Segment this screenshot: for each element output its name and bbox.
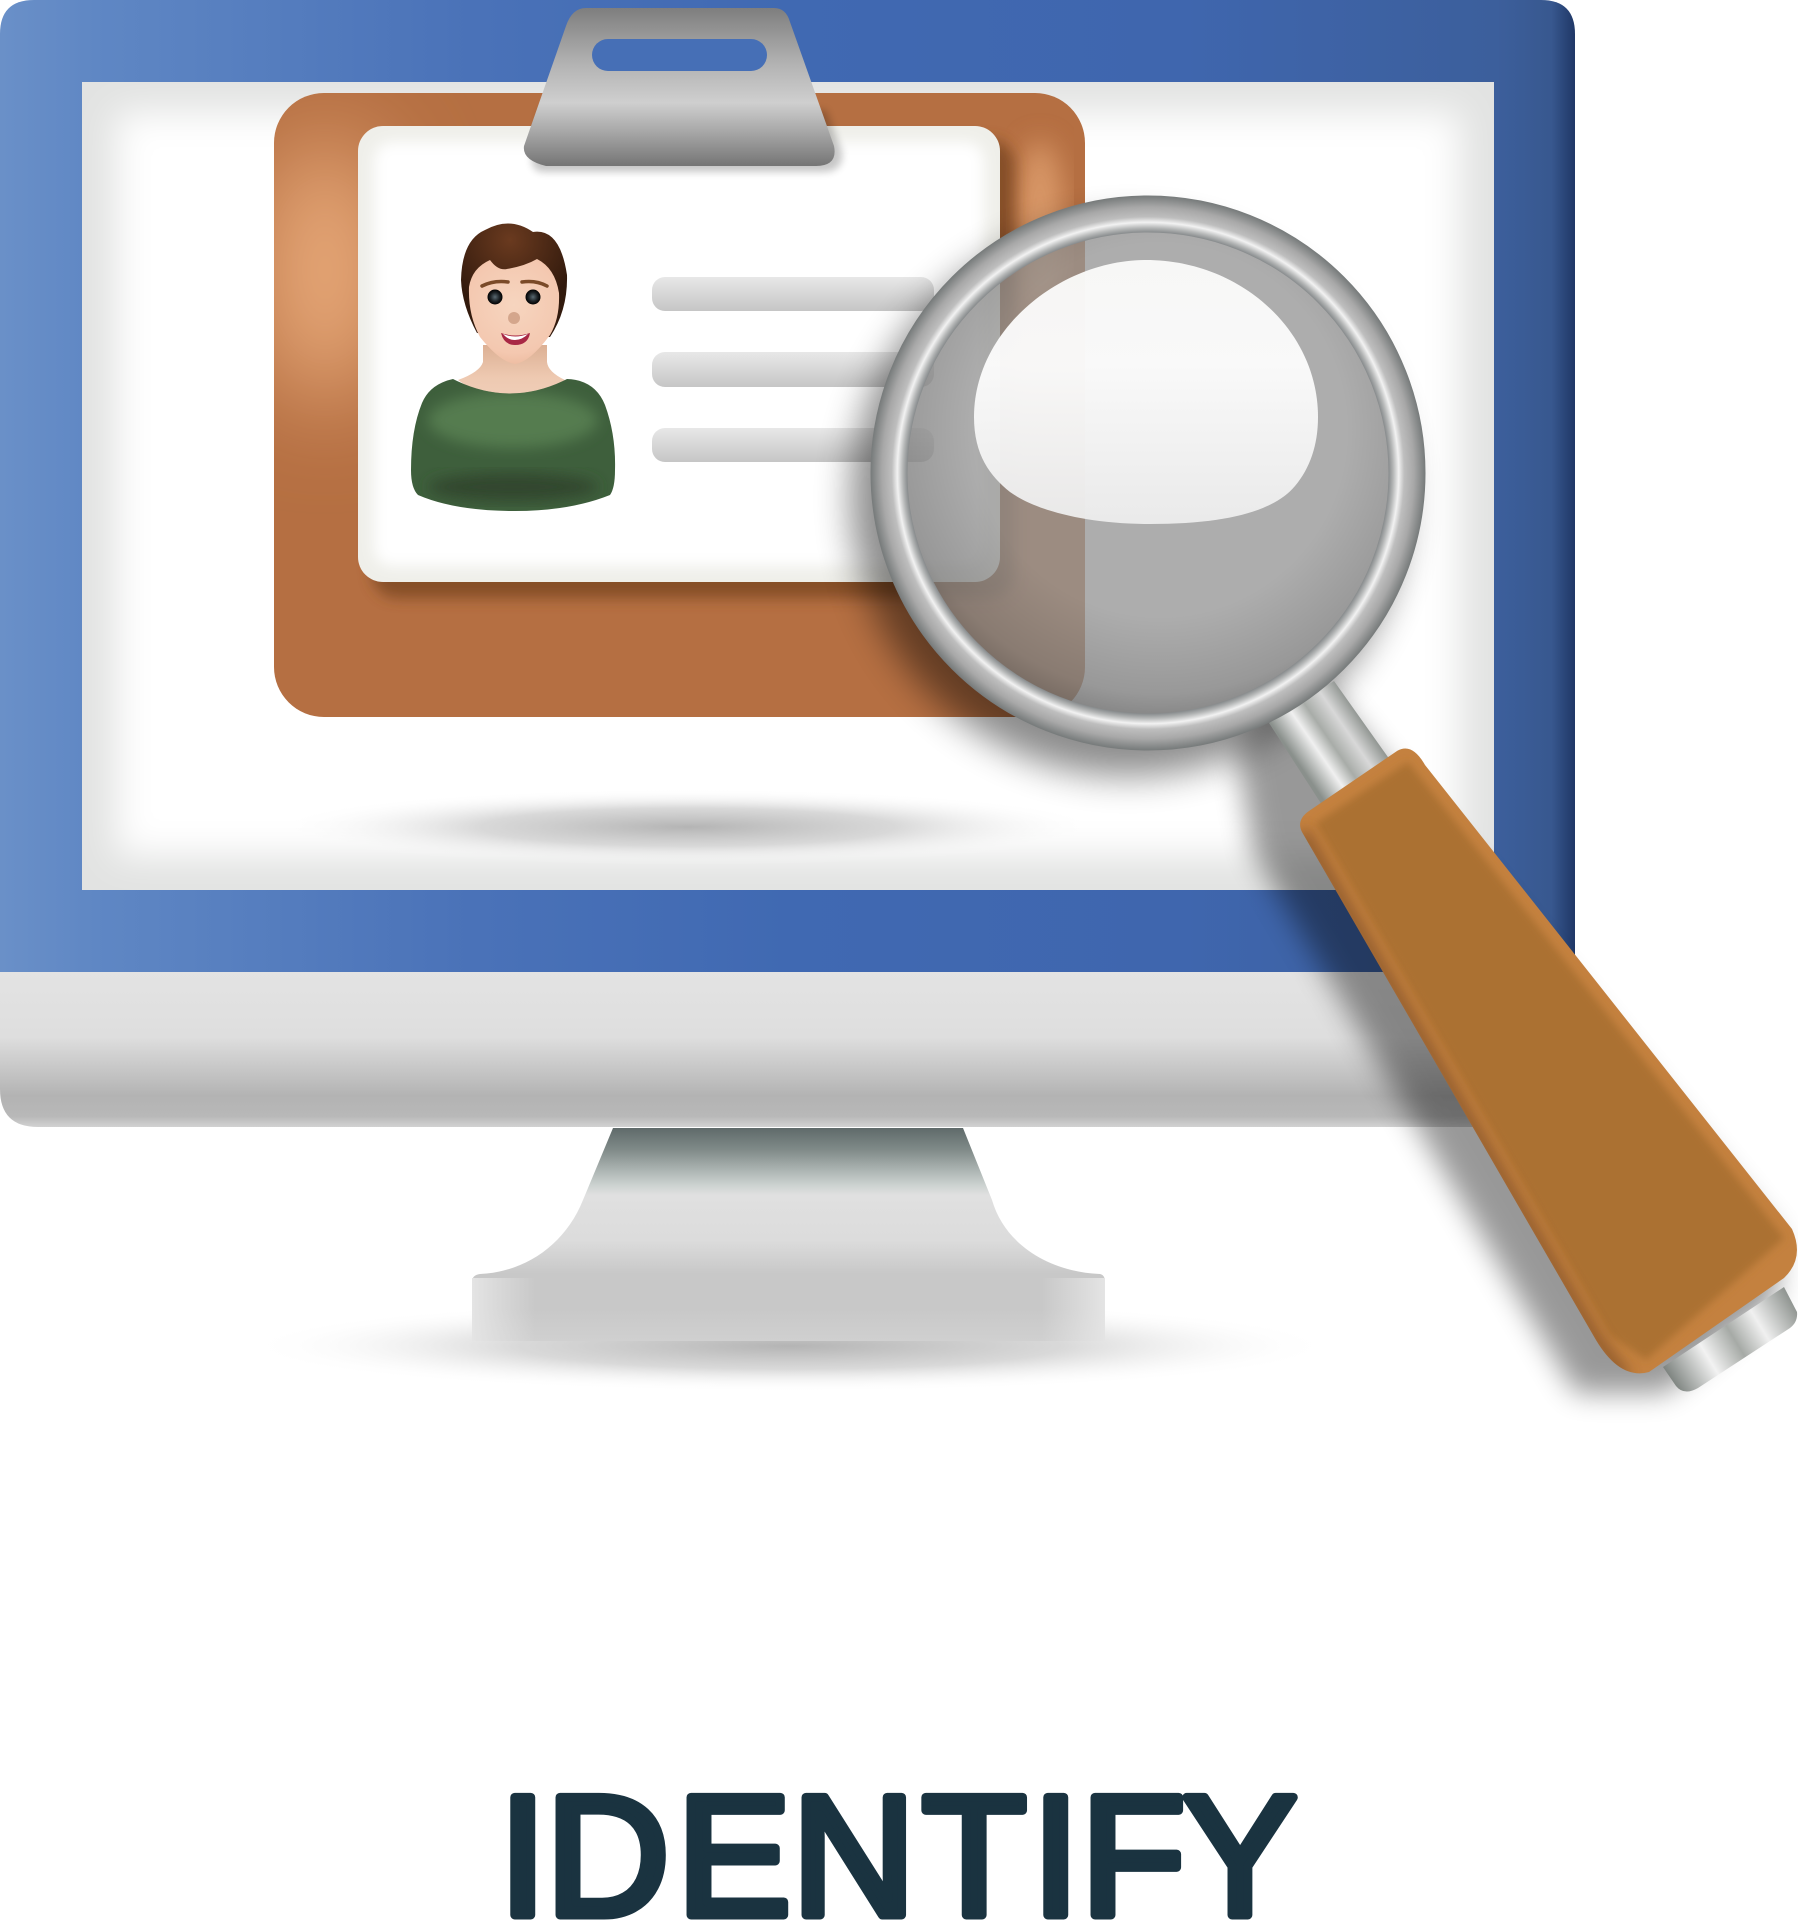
magnifier shadow [851, 222, 1405, 776]
steel neck [1269, 681, 1390, 805]
eyebrows [482, 282, 547, 286]
monitor stand [472, 1128, 1105, 1341]
stand shadow [245, 1300, 1335, 1392]
mouth [501, 333, 530, 345]
wooden handle [1300, 748, 1797, 1378]
green shirt [411, 379, 615, 511]
white id card [358, 126, 1000, 582]
id card holder [265, 8, 1085, 717]
monitor [0, 0, 1575, 1127]
lens highlight [974, 260, 1318, 524]
metal ring [889, 214, 1407, 732]
metal clip [524, 8, 835, 166]
screen ground shadow [273, 789, 1103, 865]
eyes [488, 290, 540, 304]
info lines [652, 277, 934, 462]
monitor bezel [0, 0, 1575, 972]
person portrait [411, 223, 615, 511]
orange board [265, 93, 1085, 717]
lens edge shading [905, 230, 1391, 716]
neck [458, 345, 565, 399]
hair [461, 223, 567, 337]
handle shadow [1236, 688, 1778, 1393]
lens glass [905, 230, 1391, 716]
face [469, 259, 559, 364]
magnifying glass [889, 214, 1797, 1392]
card shadow [372, 140, 1015, 598]
monitor chin [0, 972, 1575, 1127]
end cap [1663, 1287, 1797, 1392]
monitor screen [82, 82, 1494, 890]
nose [508, 312, 520, 324]
clip shadow [532, 110, 842, 172]
